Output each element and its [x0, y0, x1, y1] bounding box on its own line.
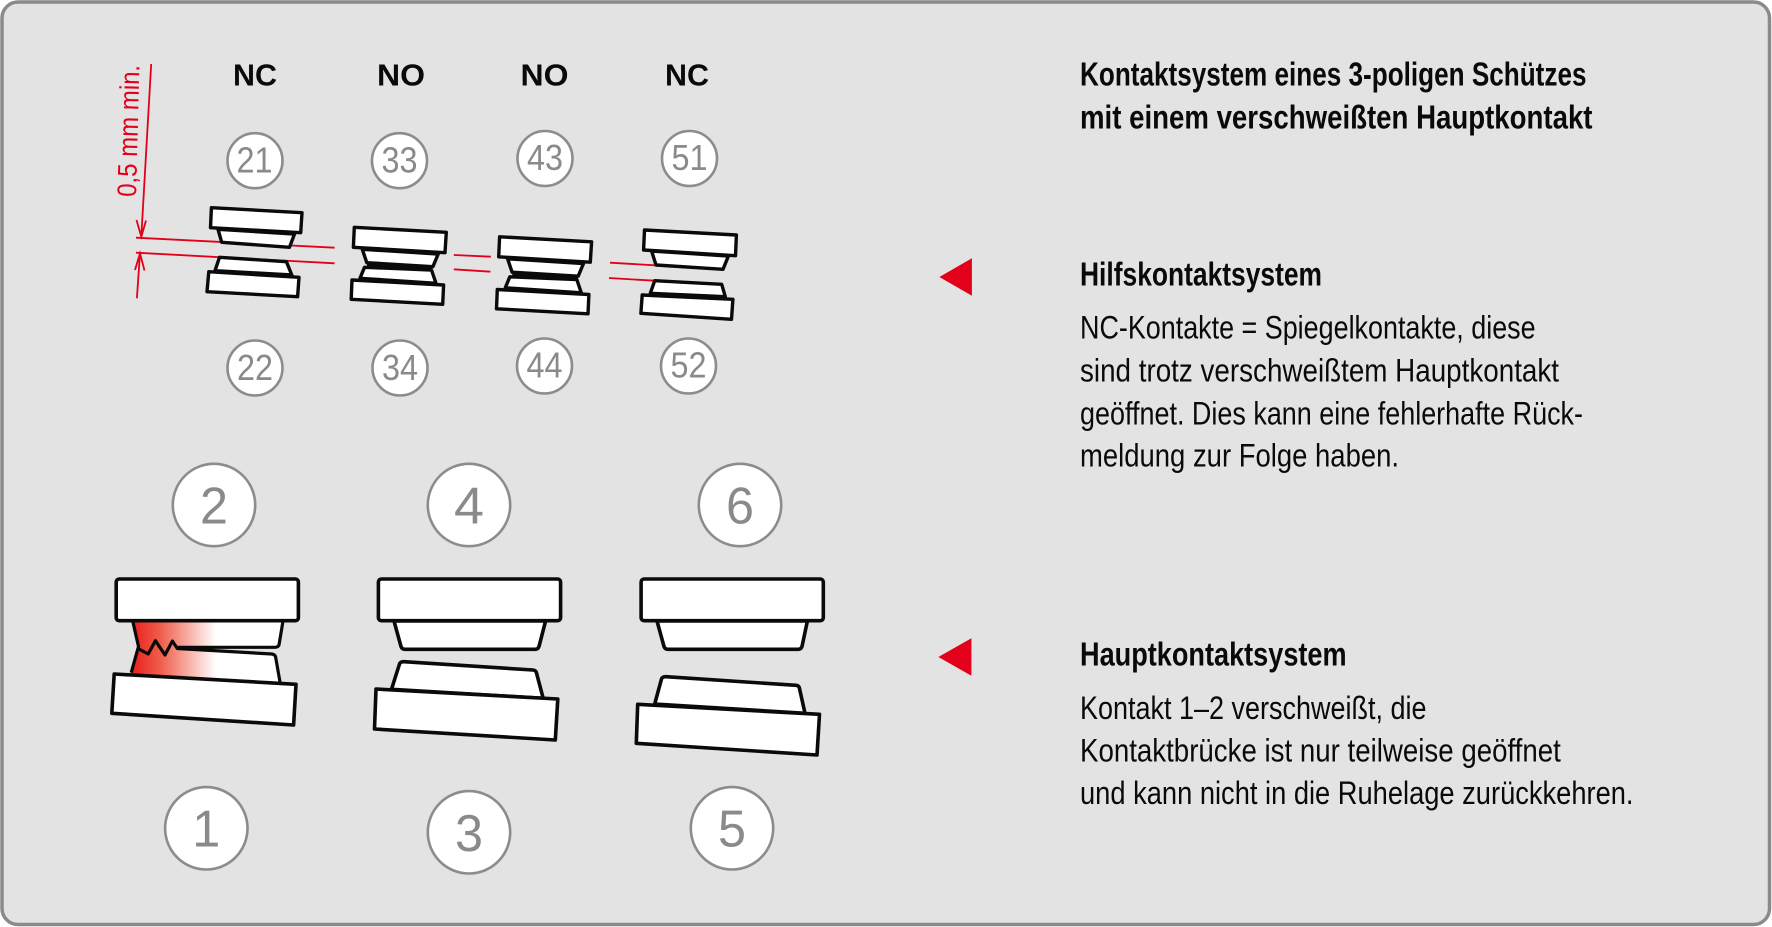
text block: Hilfskontaktsystem: geöffnet. Dies kann eine fehlerhafte Rück- [1080, 395, 1583, 431]
main terminal numbers top: 2 [200, 477, 228, 535]
weld heat area, lower contact tip [131, 641, 280, 684]
auxiliary contact 51-52 (NC) [641, 230, 736, 319]
auxiliary contact 33-34 (NO) [351, 227, 446, 304]
main terminal numbers top: 4 [454, 477, 484, 535]
main terminal numbers bottom: 5 [718, 801, 746, 859]
auxiliary contact type labels: NC [665, 58, 709, 93]
icon: red pointer main [938, 638, 971, 676]
dimension: 0,5 mm min. gap: 0,5 mm min. [112, 64, 145, 197]
main terminal numbers top [173, 464, 781, 546]
text block: Hilfskontaktsystem: sind trotz verschweißtem Hauptkontakt [1080, 353, 1559, 389]
auxiliary terminal numbers top: 21 [236, 139, 272, 180]
auxiliary terminal numbers bottom: 22 [237, 347, 273, 388]
auxiliary terminal numbers top [228, 131, 717, 188]
auxiliary contact type labels [233, 58, 709, 93]
text block: Hauptkontaktsystem: und kann nicht in die Ruhelage zurückkehren. [1080, 775, 1634, 811]
text block: Hilfskontaktsystem: meldung zur Folge haben. [1080, 438, 1399, 474]
main terminal numbers top: 6 [726, 477, 754, 535]
auxiliary terminal numbers top: 51 [672, 137, 708, 178]
contact outlines and weld seam [131, 621, 283, 682]
auxiliary terminal numbers bottom: 34 [382, 347, 418, 388]
text block: Hilfskontaktsystem: NC-Kontakte = Spiegelkontakte, diese [1080, 309, 1536, 345]
dimension: 0,5 mm min. gap [112, 64, 655, 298]
auxiliary contact 21-22 (NC) [207, 208, 302, 297]
auxiliary contact type labels: NC [233, 58, 277, 93]
text block: Hilfskontaktsystem: Hilfskontaktsystem [1080, 256, 1322, 293]
title: mit einem verschweißten Hauptkontakt [1080, 98, 1593, 135]
main contact 3-4 [374, 579, 561, 740]
text block: Hilfskontaktsystem [1080, 256, 1583, 474]
auxiliary terminal numbers bottom: 44 [526, 345, 562, 386]
main terminal numbers bottom: 1 [192, 801, 220, 859]
auxiliary terminal numbers top: 33 [382, 139, 418, 180]
auxiliary terminal numbers bottom: 52 [670, 345, 706, 386]
main terminal numbers bottom: 3 [455, 805, 483, 863]
title [1080, 56, 1593, 135]
auxiliary contact type labels: NO [520, 58, 568, 93]
main terminal numbers bottom [165, 787, 773, 874]
text block: Hauptkontaktsystem: Hauptkontaktsystem [1080, 636, 1347, 673]
title: Kontaktsystem eines 3-poligen Schützes [1080, 56, 1586, 93]
icon: red pointer auxiliary [939, 258, 972, 296]
auxiliary terminal numbers bottom [228, 338, 716, 396]
auxiliary contact type labels: NO [377, 58, 425, 93]
main contact 5-6 [636, 579, 823, 755]
text block: Hauptkontaktsystem: Kontaktbrücke ist nur teilweise geöffnet [1080, 733, 1561, 769]
text block: Hauptkontaktsystem [1080, 636, 1634, 811]
auxiliary terminal numbers top: 43 [527, 137, 563, 178]
main contact 1-2 welded [112, 579, 298, 725]
auxiliary contact 43-44 (NO) [496, 237, 592, 314]
weld heat area, upper contact tip [133, 621, 283, 655]
text block: Hauptkontaktsystem: Kontakt 1–2 verschweißt, die [1080, 690, 1426, 726]
